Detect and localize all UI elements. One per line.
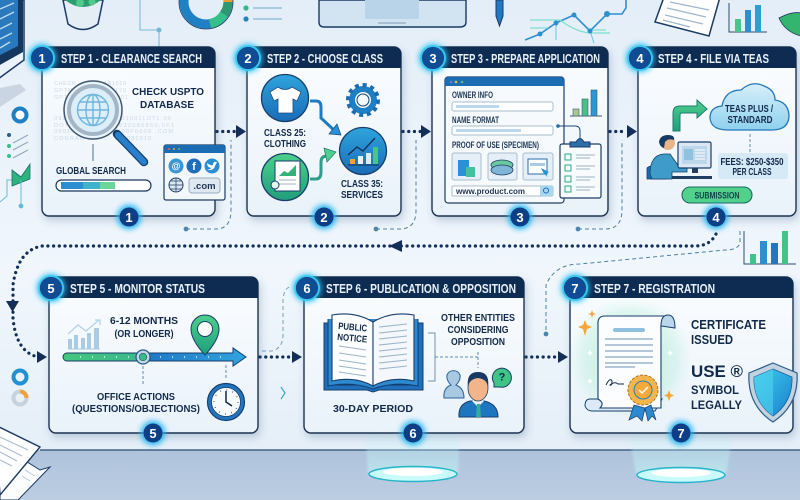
dashed link to person [435, 352, 478, 368]
arrow: upload [673, 100, 707, 131]
badge: step 7 bottom: 7 [677, 426, 685, 441]
badge: step 2 top [234, 44, 262, 72]
panel: step 2 choose class [247, 47, 401, 216]
text: other entities: OPPOSITION [451, 336, 505, 348]
badge: step 2 bottom [312, 205, 336, 229]
icon: green flag left [0, 164, 30, 208]
arrow: step 6 to 7 [526, 351, 568, 363]
icon: businessman [459, 372, 498, 417]
dashed connector: step 3 to 4 [578, 140, 622, 229]
badge: step 5 bottom: 5 [149, 426, 157, 441]
faint code text: COGRAD ......... 1A0032010 [54, 136, 151, 142]
badge: step 1 top: 1 [38, 51, 46, 66]
badge: step 6 bottom: 6 [409, 426, 417, 441]
badge: step 2 top: 2 [244, 51, 252, 66]
arrow: long dotted return from step 4 to step 5 [6, 234, 716, 363]
arrow: clothing to services [310, 101, 335, 131]
icon: open book: NOTICE [337, 332, 368, 346]
icon: donut chart [179, 0, 233, 29]
dashed connector: step 1 to 2 [186, 140, 231, 229]
badge: step 6 top: 6 [303, 281, 311, 296]
icon: browser social links: .com [193, 181, 216, 192]
icon: browser social links: @ [172, 161, 181, 171]
icon: gear [348, 85, 378, 115]
chart: bars right middle [744, 231, 796, 264]
heading: step 3: STEP 3 - PREPARE APPLICATION [451, 52, 600, 66]
badge: step 2 bottom: 2 [320, 210, 328, 225]
text: class 25: CLASS 25: [264, 127, 306, 139]
heading: step 5: STEP 5 - MONITOR STATUS [70, 282, 205, 296]
text: use registered symbol legally: SYMBOL [691, 383, 739, 397]
spotlight: step 7 [627, 425, 735, 482]
icon: open book: PUBLIC [338, 321, 368, 335]
text: class 35: CLASS 35: [341, 178, 383, 190]
icon: pen [496, 0, 503, 26]
icon: stacked papers bottom left [0, 425, 50, 500]
text: 30-day period: 30-DAY PERIOD [333, 403, 413, 415]
badge: step 3 top: 3 [429, 51, 437, 66]
panel: step 5 monitor status [49, 277, 258, 433]
icon: laptop [319, 0, 466, 27]
form window: www.product.com [455, 187, 525, 196]
chart: line chart top [525, 0, 626, 43]
arrow: step 2 to 3 [403, 125, 431, 138]
badge: step 7 top: 7 [571, 281, 579, 296]
arrow: step 5 to 6 [260, 351, 302, 363]
badge: step 5 bottom [141, 421, 165, 445]
faint code text: GPTM ............ 09170 [54, 88, 126, 94]
text: duration: (OR LONGER) [114, 328, 174, 340]
submission button: SUBMISSION [694, 190, 740, 200]
panel: step 6 publication and opposition [304, 277, 524, 433]
fees box [718, 153, 788, 179]
text: class 25: CLOTHING [264, 138, 306, 150]
icon: certificate scroll [585, 315, 675, 421]
form window: OWNER INFO [452, 90, 493, 100]
text: use registered symbol legally: USE ® [691, 362, 743, 381]
floor [0, 450, 800, 500]
icon: legend lines [243, 5, 282, 22]
icon: t-shirt circle [262, 74, 308, 122]
badge: step 1 top [28, 44, 56, 72]
form window: NAME FORMAT [452, 115, 499, 125]
text: class 35: SERVICES [341, 189, 383, 201]
text: office actions: (QUESTIONS/OBJECTIONS) [72, 403, 200, 415]
text: other entities: CONSIDERING [448, 324, 508, 336]
icon: question bubble: ? [499, 372, 506, 384]
icon: question bubble [492, 368, 511, 387]
dashed links [143, 365, 226, 385]
panel: step 1 clearance search [42, 47, 225, 216]
text: duration [110, 315, 178, 340]
connector dots [184, 227, 580, 336]
pointer line [92, 144, 94, 161]
icon: clock [208, 384, 244, 420]
badge: step 4 bottom [704, 205, 728, 229]
connector dot [556, 124, 560, 128]
arrowhead [329, 124, 341, 135]
faint code text: 09010 .......... 00100F0600 .COM [54, 129, 173, 135]
icon: sparkles [578, 310, 674, 401]
badge: step 6 bottom [401, 421, 425, 445]
text: office actions [72, 391, 200, 415]
heading: step 7: STEP 7 - REGISTRATION [594, 282, 715, 296]
text: certificate issued: CERTIFICATE [691, 317, 766, 332]
heading: step 6: STEP 6 - PUBLICATION & OPPOSITION [326, 282, 516, 296]
panel: step 4 file via TEAS [638, 47, 796, 216]
text: office actions: OFFICE ACTIONS [97, 391, 175, 403]
badge: step 1 bottom: 1 [125, 210, 133, 225]
form window [445, 77, 564, 203]
badge: step 4 bottom: 4 [712, 210, 720, 225]
arrowhead [324, 148, 336, 162]
badge: step 6 top [293, 274, 321, 302]
badge: step 4 top: 4 [636, 51, 644, 66]
icon: map pin [191, 315, 219, 355]
heading: step 2: STEP 2 - CHOOSE CLASS [267, 52, 383, 66]
badge: step 4 top [626, 44, 654, 72]
heading: step 4: STEP 4 - FILE VIA TEAS [658, 52, 769, 66]
badge: step 5 top: 5 [47, 281, 55, 296]
text: class 25 [264, 127, 306, 150]
dashed link [749, 134, 751, 152]
icon: list left [7, 133, 28, 158]
connector: top wiring [140, 0, 159, 47]
text: other entities: OTHER ENTITIES [441, 312, 515, 324]
arrow: step 1 to 2 [217, 125, 246, 138]
form window: PROOF OF USE (SPECIMEN) [452, 140, 539, 150]
icon: leaf [779, 13, 800, 36]
text: use registered symbol legally [691, 362, 743, 412]
dashed connector: step 2 to 3 [376, 140, 416, 229]
text: class 35 [341, 178, 383, 201]
badge: step 3 top [419, 44, 447, 72]
text: check USPTO database: CHECK USPTO [132, 86, 204, 98]
timeline arrow [63, 348, 246, 366]
bracket link [428, 333, 435, 381]
connector to clipboard [558, 126, 580, 138]
text: check USPTO database: DATABASE [140, 99, 194, 111]
text: certificate issued: ISSUED [691, 332, 733, 347]
text: check USPTO database [132, 86, 204, 111]
faint code text: CHECK ........... 1A1010 [54, 81, 126, 87]
icon: ring left [14, 108, 26, 122]
icon: open book [324, 314, 423, 392]
dashed connector: step 5 to 6 [262, 287, 290, 351]
badge: step 7 bottom [669, 421, 693, 445]
icon: small chevron [281, 387, 285, 399]
icon: monitor top left [0, 0, 26, 107]
text: use registered symbol legally: LEGALLY [691, 398, 742, 412]
submission button [682, 187, 752, 203]
spotlight: step 6 [365, 425, 460, 482]
text: other entities [441, 312, 515, 348]
badge: step 3 bottom [508, 205, 532, 229]
icon: paper sheet [655, 0, 720, 36]
icon: person at computer [647, 135, 712, 179]
text: global search: GLOBAL SEARCH [56, 165, 126, 177]
faint code text: DOT ............ 00932086860.0F1 [54, 123, 174, 129]
icon: magnifier with globe [64, 81, 144, 162]
text: duration: 6-12 MONTHS [110, 315, 178, 327]
progress bar [56, 180, 151, 191]
chart: faded growth [68, 320, 100, 349]
text: certificate issued [691, 317, 766, 347]
cloud: TEAS PLUS / [725, 103, 773, 115]
faint code text: 095 ............ 001001001LOTL.00 [54, 116, 171, 122]
cloud: STANDARD [728, 114, 773, 126]
icon: document chart circle [262, 154, 308, 200]
icon: plant pot [63, 0, 103, 30]
heading: step 1: STEP 1 - CLEARANCE SEARCH [61, 52, 202, 66]
icon: shield [749, 363, 797, 422]
icon: connector node [156, 28, 162, 32]
arrow: document to services [310, 156, 330, 179]
faint code text: GPTMS ........... 00101 [54, 95, 128, 101]
badge: step 7 top [561, 274, 589, 302]
chart: bars [570, 90, 602, 116]
faint code text [54, 81, 174, 142]
icon: rings left [14, 370, 26, 404]
badge: step 5 top [37, 274, 65, 302]
certificate glow [568, 296, 692, 420]
icon: background person [444, 371, 464, 398]
badge: step 1 bottom [117, 205, 141, 229]
panel: step 7 registration [568, 277, 797, 433]
icon: growth chart circle [340, 128, 386, 174]
icon: browser social links: f [192, 161, 196, 173]
cloud [710, 84, 789, 130]
chart: small bars top right [729, 3, 767, 32]
arrow: step 3 to 4 [610, 125, 637, 138]
icon: clipboard checklist [560, 138, 601, 198]
badge: step 3 bottom: 3 [516, 210, 524, 225]
dashed connector: step 4 to 7 [546, 231, 740, 334]
fees box: PER CLASS [732, 166, 772, 178]
icon: browser social links [164, 145, 225, 200]
panel: step 3 prepare application [432, 47, 608, 216]
